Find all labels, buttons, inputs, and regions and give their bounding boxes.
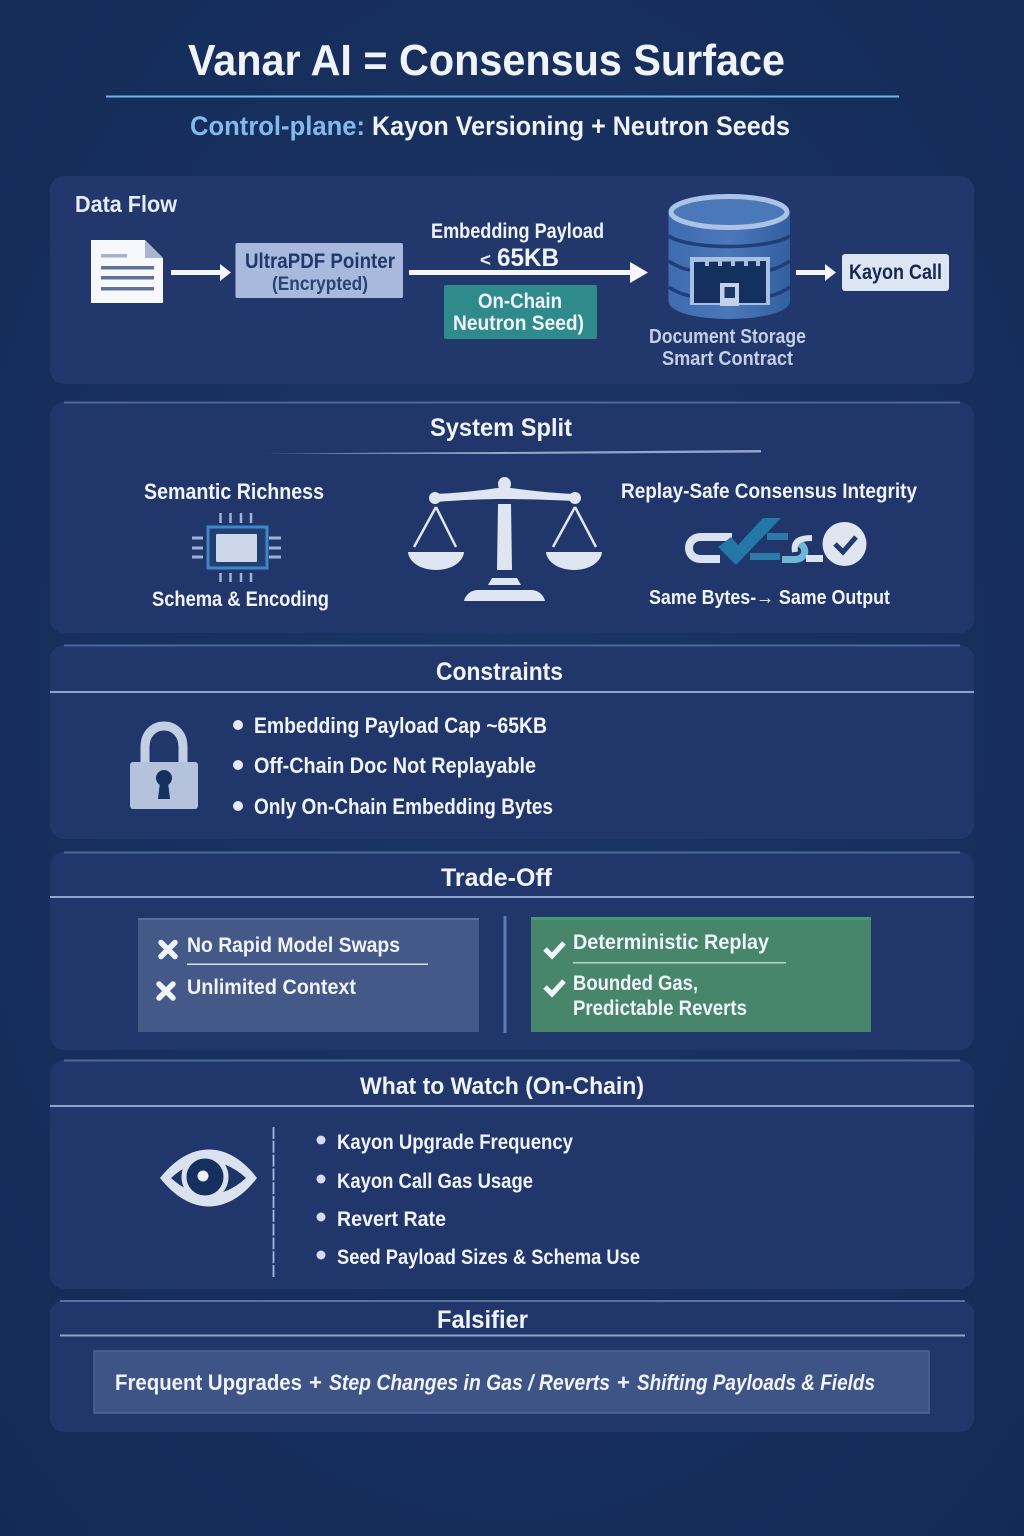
list: constraints: Off-Chain Doc Not Replayable <box>254 753 536 778</box>
panel: constraints <box>50 645 974 839</box>
right column: replay-safe consensus integrity: Same Bytes-→ Same Output <box>649 587 890 609</box>
subtitle: Kayon Versioning + Neutron Seeds <box>372 111 790 141</box>
title: Vanar AI = Consensus Surface <box>188 36 785 85</box>
label: embedding payload <box>431 220 604 272</box>
panel: falsifier <box>50 1300 974 1432</box>
label: document storage smart contract: Smart Contract <box>662 348 793 370</box>
callout: falsifier statement: Shifting Payloads & Fields <box>637 1370 875 1395</box>
panel: trade-off <box>50 852 974 1050</box>
box: costs: Unlimited Context <box>187 976 356 999</box>
list: on-chain metrics: Kayon Upgrade Frequency <box>337 1131 573 1154</box>
icon: document <box>91 240 163 303</box>
box: UltraPDF pointer: UltraPDF Pointer <box>245 250 395 273</box>
callout: falsifier statement: + <box>309 1370 322 1395</box>
box: benefits: Deterministic Replay <box>573 931 769 954</box>
heading: trade-off: Trade-Off <box>441 864 553 892</box>
icon: database with castle <box>668 196 790 319</box>
arrow: pointer to storage <box>409 262 648 283</box>
icon: check <box>545 981 564 994</box>
icon: balance scales <box>408 477 602 601</box>
left column: semantic richness: Schema & Encoding <box>152 588 329 611</box>
box: on-chain neutron seed: Neutron Seed) <box>453 312 584 335</box>
box: on-chain neutron seed: On-Chain <box>478 290 562 313</box>
box: benefits: Bounded Gas, <box>573 972 698 995</box>
box: benefits <box>531 917 871 1032</box>
box: UltraPDF pointer: (Encrypted) <box>272 274 368 295</box>
callout: falsifier statement: Frequent Upgrades <box>115 1370 302 1395</box>
box: on-chain neutron seed <box>444 285 597 339</box>
box: UltraPDF pointer <box>236 243 403 298</box>
label: embedding payload: Embedding Payload <box>431 220 604 243</box>
subtitle: Control-plane: <box>190 111 365 141</box>
box: kayon call <box>842 254 949 291</box>
box: kayon call: Kayon Call <box>849 261 942 284</box>
heading: system split: System Split <box>430 414 573 442</box>
label: document storage smart contract: Document Storage <box>649 326 806 348</box>
box: benefits: Predictable Reverts <box>573 997 747 1020</box>
panel: what to watch <box>50 1060 974 1289</box>
label: embedding payload: 65KB <box>497 244 559 272</box>
subtitle <box>190 111 790 141</box>
label: embedding payload: < <box>480 250 491 270</box>
icon: eye <box>160 1150 257 1206</box>
heading: what to watch: What to Watch (On-Chain) <box>360 1073 644 1100</box>
heading: constraints: Constraints <box>436 658 563 686</box>
panel: system split <box>50 402 974 633</box>
box: costs: No Rapid Model Swaps <box>187 934 400 957</box>
right column: replay-safe consensus integrity: Replay-Safe Consensus Integrity <box>621 480 917 503</box>
callout: falsifier statement <box>94 1351 929 1413</box>
arrow: storage to kayon call <box>796 264 836 281</box>
left column: semantic richness <box>144 479 329 611</box>
list: on-chain metrics: Revert Rate <box>337 1208 446 1231</box>
left column: semantic richness: Semantic Richness <box>144 479 324 504</box>
label: document storage smart contract <box>649 326 806 370</box>
callout: falsifier statement: Step Changes in Gas / Reverts <box>329 1370 610 1395</box>
heading: data flow: Data Flow <box>75 191 177 217</box>
arrow: document to pointer <box>171 264 231 281</box>
list: constraints <box>233 713 553 819</box>
callout: falsifier statement: + <box>617 1370 630 1395</box>
icon: chain with checkmarks <box>689 518 866 566</box>
list: constraints: Only On-Chain Embedding Bytes <box>254 794 553 819</box>
icon: check <box>545 943 564 956</box>
icon: cross <box>159 984 173 998</box>
list: on-chain metrics <box>316 1131 640 1269</box>
heading: falsifier: Falsifier <box>437 1306 528 1334</box>
icon: chip <box>192 513 281 582</box>
list: constraints: Embedding Payload Cap ~65KB <box>254 713 547 738</box>
list: on-chain metrics: Kayon Call Gas Usage <box>337 1170 533 1193</box>
list: on-chain metrics: Seed Payload Sizes & Schema Use <box>337 1246 640 1269</box>
box: costs <box>138 918 479 1032</box>
right column: replay-safe consensus integrity <box>621 480 917 609</box>
panel: data flow <box>50 176 974 384</box>
icon: cross <box>161 942 175 956</box>
icon: padlock <box>130 726 198 809</box>
